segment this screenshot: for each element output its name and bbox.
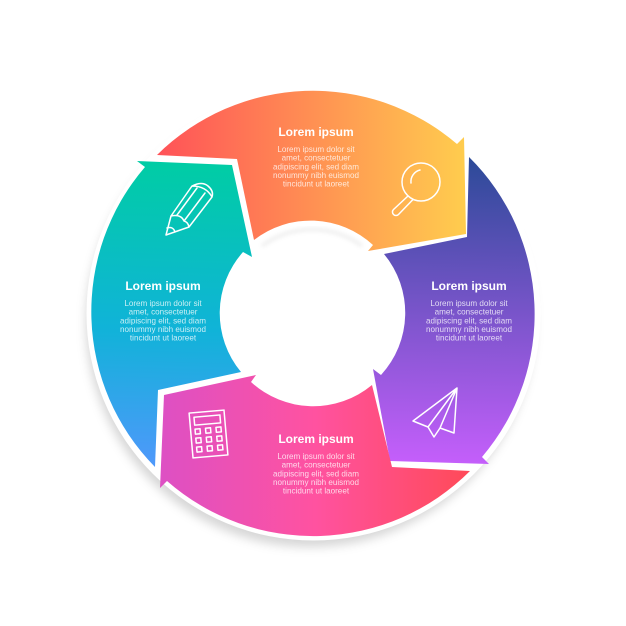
heading: Lorem ipsum — [431, 279, 507, 293]
arrow segment: teal — [91, 161, 252, 467]
body text — [426, 299, 512, 343]
body text: nonummy nibh euismod — [273, 171, 359, 180]
icon: paper plane — [413, 388, 457, 437]
body text: Lorem ipsum dolor sit — [277, 145, 355, 154]
body text: amet, consectetuer — [282, 461, 351, 470]
body text: tincidunt ut laoreet — [283, 487, 350, 496]
body text: nonummy nibh euismod — [273, 478, 359, 487]
body text — [120, 299, 206, 343]
body text: amet, consectetuer — [435, 308, 504, 317]
body text: tincidunt ut laoreet — [283, 180, 350, 189]
body text: Lorem ipsum dolor sit — [277, 452, 355, 461]
heading: Lorem ipsum — [278, 125, 354, 139]
body text — [273, 145, 359, 189]
drop shadow — [86, 99, 534, 547]
body text: amet, consectetuer — [129, 308, 198, 317]
center hole inner shadow — [262, 229, 362, 246]
body text — [273, 452, 359, 496]
white ring base — [86, 86, 540, 540]
icon: calculator — [189, 410, 228, 458]
body text: tincidunt ut laoreet — [436, 334, 503, 343]
arrow segment: purple — [373, 157, 535, 464]
body text: adipiscing elit, sed diam — [273, 162, 359, 171]
body text: Lorem ipsum dolor sit — [124, 299, 202, 308]
body text: Lorem ipsum dolor sit — [430, 299, 508, 308]
body text: nonummy nibh euismod — [426, 325, 512, 334]
body text: nonummy nibh euismod — [120, 325, 206, 334]
arrow segment: orange — [157, 91, 466, 251]
icon: magnifier — [392, 163, 440, 216]
body text: adipiscing elit, sed diam — [273, 469, 359, 478]
body text: adipiscing elit, sed diam — [120, 316, 206, 325]
heading: Lorem ipsum — [125, 279, 201, 293]
body text: adipiscing elit, sed diam — [426, 316, 512, 325]
body text: amet, consectetuer — [282, 154, 351, 163]
arrow segment: pink — [160, 375, 470, 536]
icon: pencil — [166, 184, 212, 235]
body text: tincidunt ut laoreet — [130, 334, 197, 343]
heading: Lorem ipsum — [278, 432, 354, 446]
